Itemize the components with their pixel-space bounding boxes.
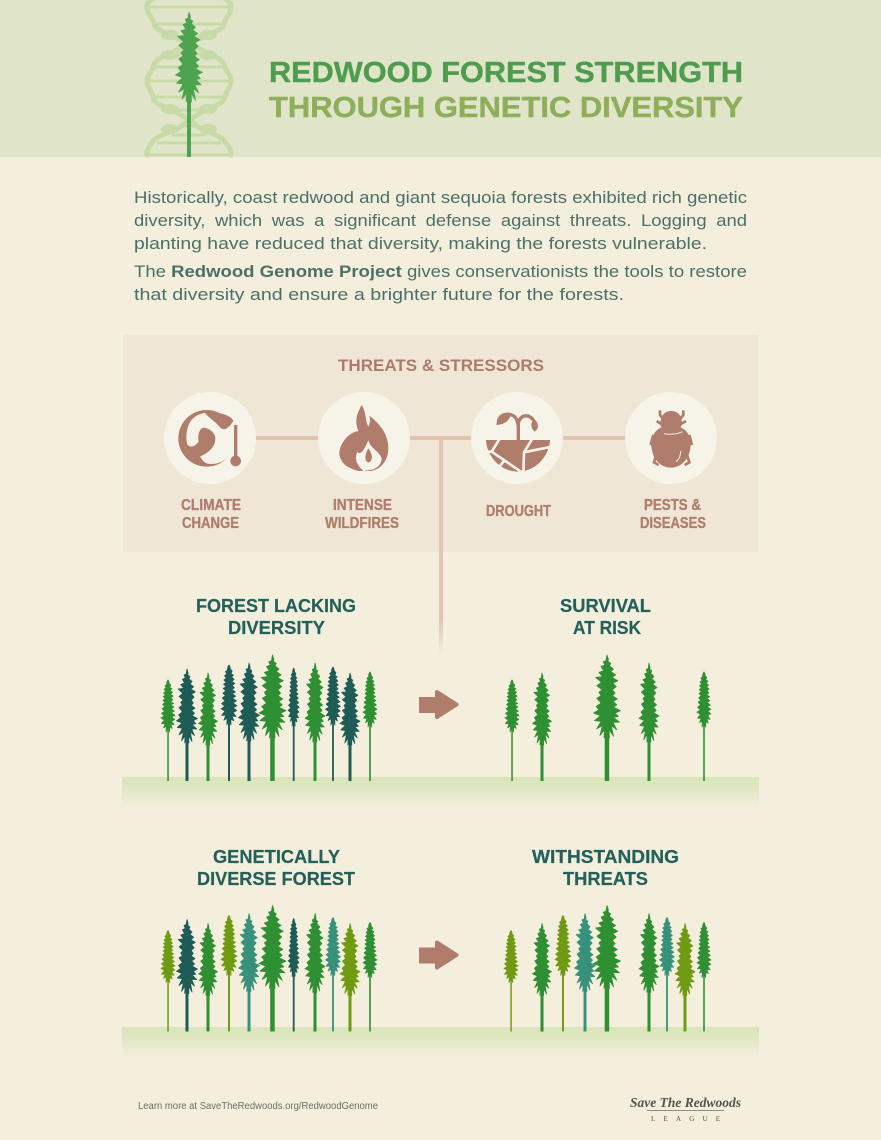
heading: forest lacking diversity bbox=[196, 596, 356, 638]
panel: threats and stressors bbox=[123, 335, 758, 552]
label: climate change bbox=[181, 497, 241, 532]
trees: withstanding threats bbox=[504, 906, 711, 1032]
label: drought: DROUGHT bbox=[486, 503, 551, 520]
label: climate change: CLIMATE bbox=[181, 497, 241, 514]
heading: genetically diverse forest: GENETICALLY bbox=[213, 847, 340, 867]
trees: forest lacking diversity bbox=[161, 655, 377, 781]
trees: genetically diverse forest bbox=[161, 906, 377, 1032]
label: pests and diseases bbox=[640, 497, 706, 532]
heading: survival at risk bbox=[560, 596, 651, 638]
heading: threats and stressors: THREATS & STRESSORS bbox=[338, 356, 544, 375]
logo: Save The Redwoods League bbox=[630, 1096, 742, 1123]
header band bbox=[0, 0, 881, 157]
ground strip: row one bbox=[122, 777, 759, 807]
arrow: row one bbox=[419, 692, 456, 717]
footer link text: Learn more at SaveTheRedwoods.org/RedwoodGenome bbox=[138, 1101, 378, 1112]
label: climate change: CHANGE bbox=[182, 515, 239, 532]
heading: genetically diverse forest bbox=[197, 847, 355, 889]
ground strip: row two bbox=[122, 1027, 759, 1057]
logo: Save The Redwoods League: Save The Redwoods bbox=[630, 1096, 742, 1111]
icon: DNA helix with redwood tree bbox=[147, 0, 231, 157]
trees: survival at risk bbox=[505, 655, 711, 781]
intro text: The Redwood Genome Project gives conservationists the tools to restore bbox=[134, 263, 747, 281]
heading: forest lacking diversity: DIVERSITY bbox=[228, 618, 325, 638]
heading: survival at risk: SURVIVAL bbox=[560, 596, 651, 616]
intro text: that diversity and ensure a brighter future for the forests. bbox=[134, 286, 624, 304]
icon: climate change bbox=[164, 392, 256, 484]
intro text: diversity, which was a significant defense against threats. Logging and bbox=[134, 212, 747, 230]
title bbox=[269, 57, 743, 124]
label: pests and diseases: PESTS & bbox=[644, 497, 701, 514]
label: intense wildfires bbox=[325, 497, 399, 532]
label: intense wildfires: INTENSE bbox=[333, 497, 392, 514]
title: REDWOOD FOREST STRENGTH bbox=[269, 57, 743, 89]
heading: withstanding threats bbox=[532, 847, 679, 889]
icon: pests and diseases bbox=[625, 392, 717, 484]
intro text: Historically, coast redwood and giant sequoia forests exhibited rich genetic bbox=[134, 189, 747, 207]
logo: Save The Redwoods League: LEAGUE bbox=[651, 1115, 720, 1123]
connector lines bbox=[210, 438, 671, 552]
intro text bbox=[134, 189, 747, 304]
heading: withstanding threats: WITHSTANDING bbox=[532, 847, 679, 867]
label: intense wildfires: WILDFIRES bbox=[325, 515, 399, 532]
heading: withstanding threats: THREATS bbox=[563, 869, 648, 889]
icon: drought bbox=[471, 392, 563, 484]
label: pests and diseases: DISEASES bbox=[640, 515, 706, 532]
heading: survival at risk: AT RISK bbox=[573, 618, 641, 638]
arrow: row two bbox=[419, 942, 456, 968]
icon: intense wildfires bbox=[318, 392, 410, 484]
heading: genetically diverse forest: DIVERSE FOREST bbox=[197, 869, 355, 889]
heading: forest lacking diversity: FOREST LACKING bbox=[196, 596, 356, 616]
intro text: planting have reduced that diversity, making the forests vulnerable. bbox=[134, 235, 707, 253]
connector tail below panel bbox=[439, 552, 443, 655]
title: THROUGH GENETIC DIVERSITY bbox=[269, 92, 743, 124]
